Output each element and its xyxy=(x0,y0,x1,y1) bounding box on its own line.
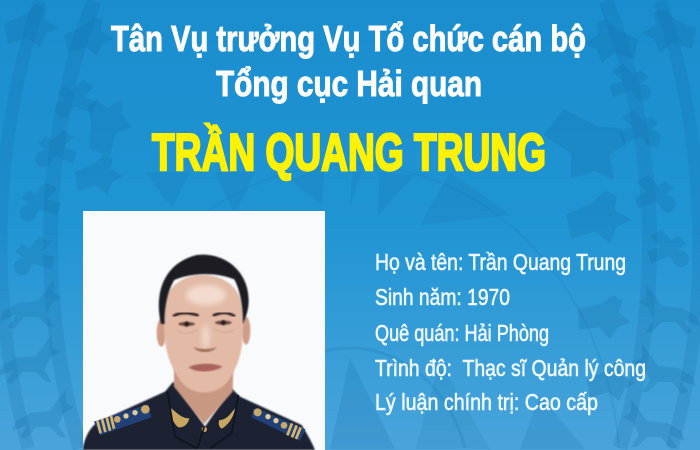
biography details: Họ và tên: Trần Quang Trung xyxy=(375,249,626,275)
face highlights xyxy=(186,285,226,349)
biography details: Quê quán: Hải Phòng xyxy=(375,320,549,346)
biography details xyxy=(375,249,646,415)
title xyxy=(111,18,586,104)
biography details: Sinh năm: 1970 xyxy=(375,284,510,310)
title: Tân Vụ trưởng Vụ Tổ chức cán bộ xyxy=(111,18,586,59)
right epaulette xyxy=(252,408,305,441)
collar insignia xyxy=(169,407,235,432)
ears xyxy=(157,317,250,347)
mouth xyxy=(189,364,223,372)
eyes xyxy=(177,320,235,333)
collar lines xyxy=(167,392,238,448)
portrait photo xyxy=(83,211,325,450)
biography details: Trình độ: Thạc sĩ Quản lý công xyxy=(375,355,646,381)
face xyxy=(164,275,243,393)
neck xyxy=(174,367,233,424)
biography details: Lý luận chính trị: Cao cấp xyxy=(375,389,598,415)
left epaulette xyxy=(94,404,151,435)
name heading: TRẦN QUANG TRUNG xyxy=(152,123,546,182)
title: Tổng cục Hải quan xyxy=(216,63,482,104)
hair xyxy=(159,255,249,324)
nose xyxy=(193,346,217,352)
uniform xyxy=(83,382,315,450)
eyebrows xyxy=(174,313,234,316)
